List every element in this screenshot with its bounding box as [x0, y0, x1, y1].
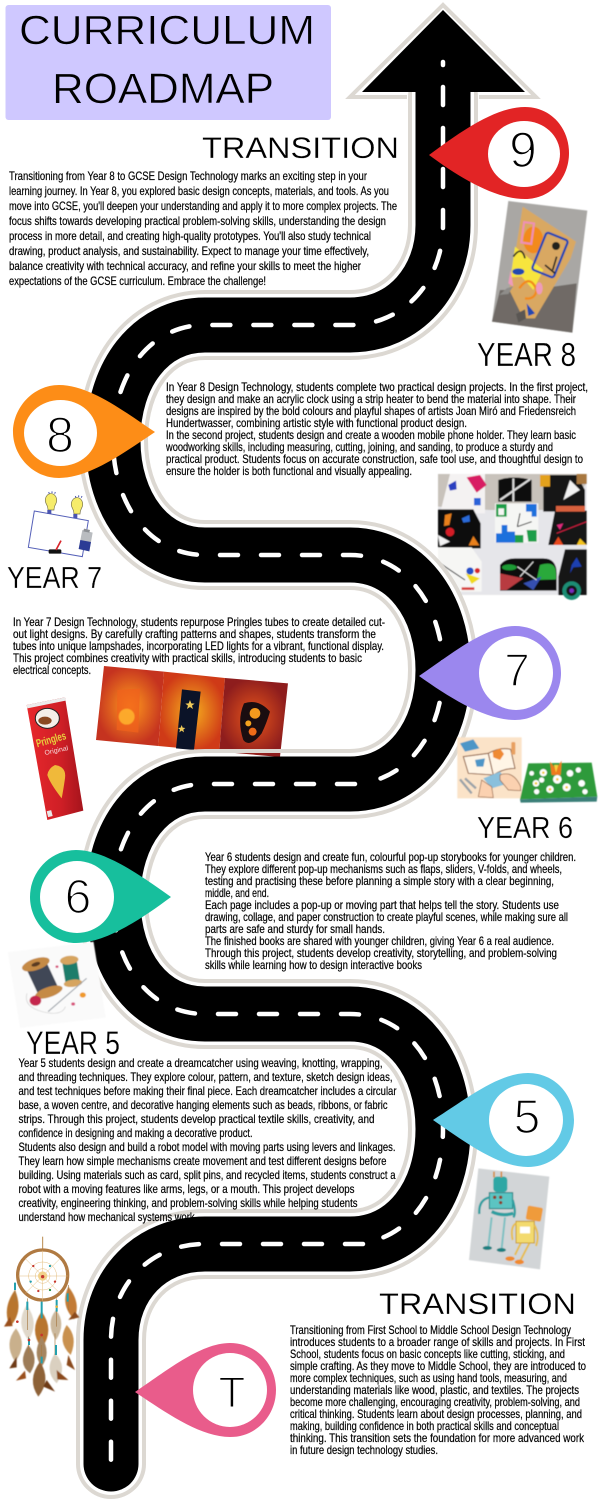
- pin: 5: [433, 1073, 574, 1167]
- text: year 5: base, a woven centre, and decorative hanging elements such as beads, ribbons, or fabric: [18, 1098, 388, 1112]
- text: transition to GCSE: expectations of the GCSE curriculum. Embrace the challenge!: [9, 274, 266, 288]
- title line 1: CURRICULUM: [19, 7, 315, 53]
- road edge lines: [111, 97, 443, 1464]
- road surface: [111, 90, 443, 1464]
- text: transition to GCSE: learning journey. In Year 8, you explored basic design concepts, materials, and tools. As you: [9, 184, 389, 198]
- hoop: [18, 1250, 68, 1300]
- text: transition to GCSE: drawing, product analysis, and sustainability. Expect to manage your time effectively,: [9, 244, 369, 258]
- number 9: 9: [509, 122, 537, 178]
- text: year 5: creativity, engineering thinking, and problem-solving skills while helping students: [18, 1196, 358, 1210]
- text: year 7: electrical concepts.: [13, 663, 91, 677]
- pin: 8: [13, 385, 155, 478]
- photo: acrylic clocks: [438, 474, 587, 600]
- pin: T: [135, 1343, 276, 1437]
- text: year 7: This project combines creativity with practical skills, introducing students to basic: [13, 651, 362, 665]
- text: year 7: out light designs. By carefully crafting patterns and shapes, students transform the: [13, 627, 376, 641]
- text: transition to GCSE: [9, 169, 397, 288]
- text: year 6: [205, 850, 576, 972]
- text: year 5: building. Using materials such as card, split pins, and recycled items, students construct a: [18, 1168, 396, 1182]
- photo: wooden phone holder: [492, 201, 587, 333]
- photo: thread spools and needle: [8, 942, 106, 1028]
- heading: transition GCSE: TRANSITION: [202, 132, 399, 165]
- feathers: [4, 1287, 79, 1397]
- text: transition to GCSE: focus shifts towards developing practical problem-solving skills, understanding the design: [9, 214, 386, 228]
- text: year 5: Year 5 students design and create a dreamcatcher using weaving, knotting, wrapping,: [18, 1056, 382, 1070]
- title line 2: ROADMAP: [52, 65, 274, 113]
- text: year 8: ensure the holder is both functional and visually appealing.: [166, 464, 412, 478]
- text: year 7: [13, 615, 385, 677]
- text: year 8: Hundertwasser, combining artistic style with functional product design.: [166, 416, 467, 430]
- road: winding route with arrow head: [111, 5, 536, 1466]
- text: transition to GCSE: Transitioning from Year 8 to GCSE Design Technology marks an exciting step in your: [9, 169, 367, 183]
- strings and beads: [15, 1285, 68, 1358]
- heading: transition first school: TRANSITION: [379, 1288, 576, 1321]
- photo: pop-up instructions and book: [457, 737, 597, 803]
- pin: 7: [419, 626, 561, 720]
- text: year 8: [165, 380, 588, 478]
- photo: robot models: [469, 1168, 549, 1269]
- panel: title: [6, 5, 331, 120]
- photo: pringles tube: [27, 697, 83, 820]
- number 5: 5: [514, 1091, 540, 1144]
- text: year 5: strips. Through this project, students develop practical textile skills, creativity, and: [18, 1112, 374, 1126]
- number 6: 6: [65, 871, 91, 924]
- heading: year 8: YEAR 8: [477, 336, 576, 373]
- text: year 7: In Year 7 Design Technology, students repurpose Pringles tubes to create detailed cut-: [13, 615, 385, 629]
- heading: year 6: YEAR 6: [477, 810, 573, 845]
- text: year 7: tubes into unique lampshades, incorporating LED lights for a vibrant, functional display.: [13, 639, 384, 653]
- arrow head: [362, 10, 525, 92]
- pin: 9: [429, 107, 569, 199]
- number 8: 8: [46, 407, 74, 463]
- text: year 5: [18, 1056, 397, 1224]
- text: transition first school: in future design technology studies.: [290, 1443, 438, 1457]
- number 7: 7: [504, 644, 530, 696]
- text: year 6: skills while learning how to design interactive books: [205, 958, 422, 972]
- text: year 6: middle, and end.: [205, 886, 269, 900]
- text: year 5: Students also design and build a robot model with moving parts using levers and linkages.: [18, 1140, 396, 1154]
- pin: 6: [30, 850, 171, 943]
- text: year 5: confidence in designing and making a decorative product.: [18, 1126, 252, 1140]
- letter T: T: [219, 1368, 245, 1417]
- text: year 5: They learn how simple mechanisms create movement and test different designs before: [18, 1154, 387, 1168]
- text: transition first school: [290, 1323, 586, 1457]
- text: transition to GCSE: process in more detail, and creating high-quality prototypes. You'll also study technical: [9, 229, 371, 243]
- top dash: [441, 62, 445, 65]
- centre dashes: [111, 87, 443, 1466]
- text: year 6: parts are safe and sturdy for small hands.: [205, 922, 385, 936]
- photo: dreamcatcher: [4, 1237, 79, 1397]
- text: year 5: and test techniques before making their final piece. Each dreamcatcher includes a circular: [18, 1084, 397, 1098]
- text: year 5: understand how mechanical systems work: [18, 1210, 195, 1224]
- heading: year 7: YEAR 7: [7, 560, 102, 595]
- text: transition to GCSE: move into GCSE, you'll deepen your understanding and apply it to more complex projects. The: [9, 199, 397, 213]
- photo: pringles tube: Original: [44, 745, 69, 757]
- text: year 5: robot with a moving features like arms, legs, or a mouth. This project develops: [18, 1182, 354, 1196]
- text: year 5: and threading techniques. They explore colour, pattern, and texture, sketch design ideas,: [18, 1070, 392, 1084]
- photo: lantern lights: [96, 666, 288, 757]
- text: transition to GCSE: balance creativity with technical accuracy, and refine your skills to meet the higher: [9, 259, 361, 273]
- heading: year 5: YEAR 5: [26, 1025, 120, 1061]
- photo: pringles tube: Pringles: [35, 730, 68, 750]
- icon: electrical circuit: [28, 491, 93, 557]
- road casing gap: [111, 97, 443, 1464]
- arrow head outline: [350, 5, 536, 97]
